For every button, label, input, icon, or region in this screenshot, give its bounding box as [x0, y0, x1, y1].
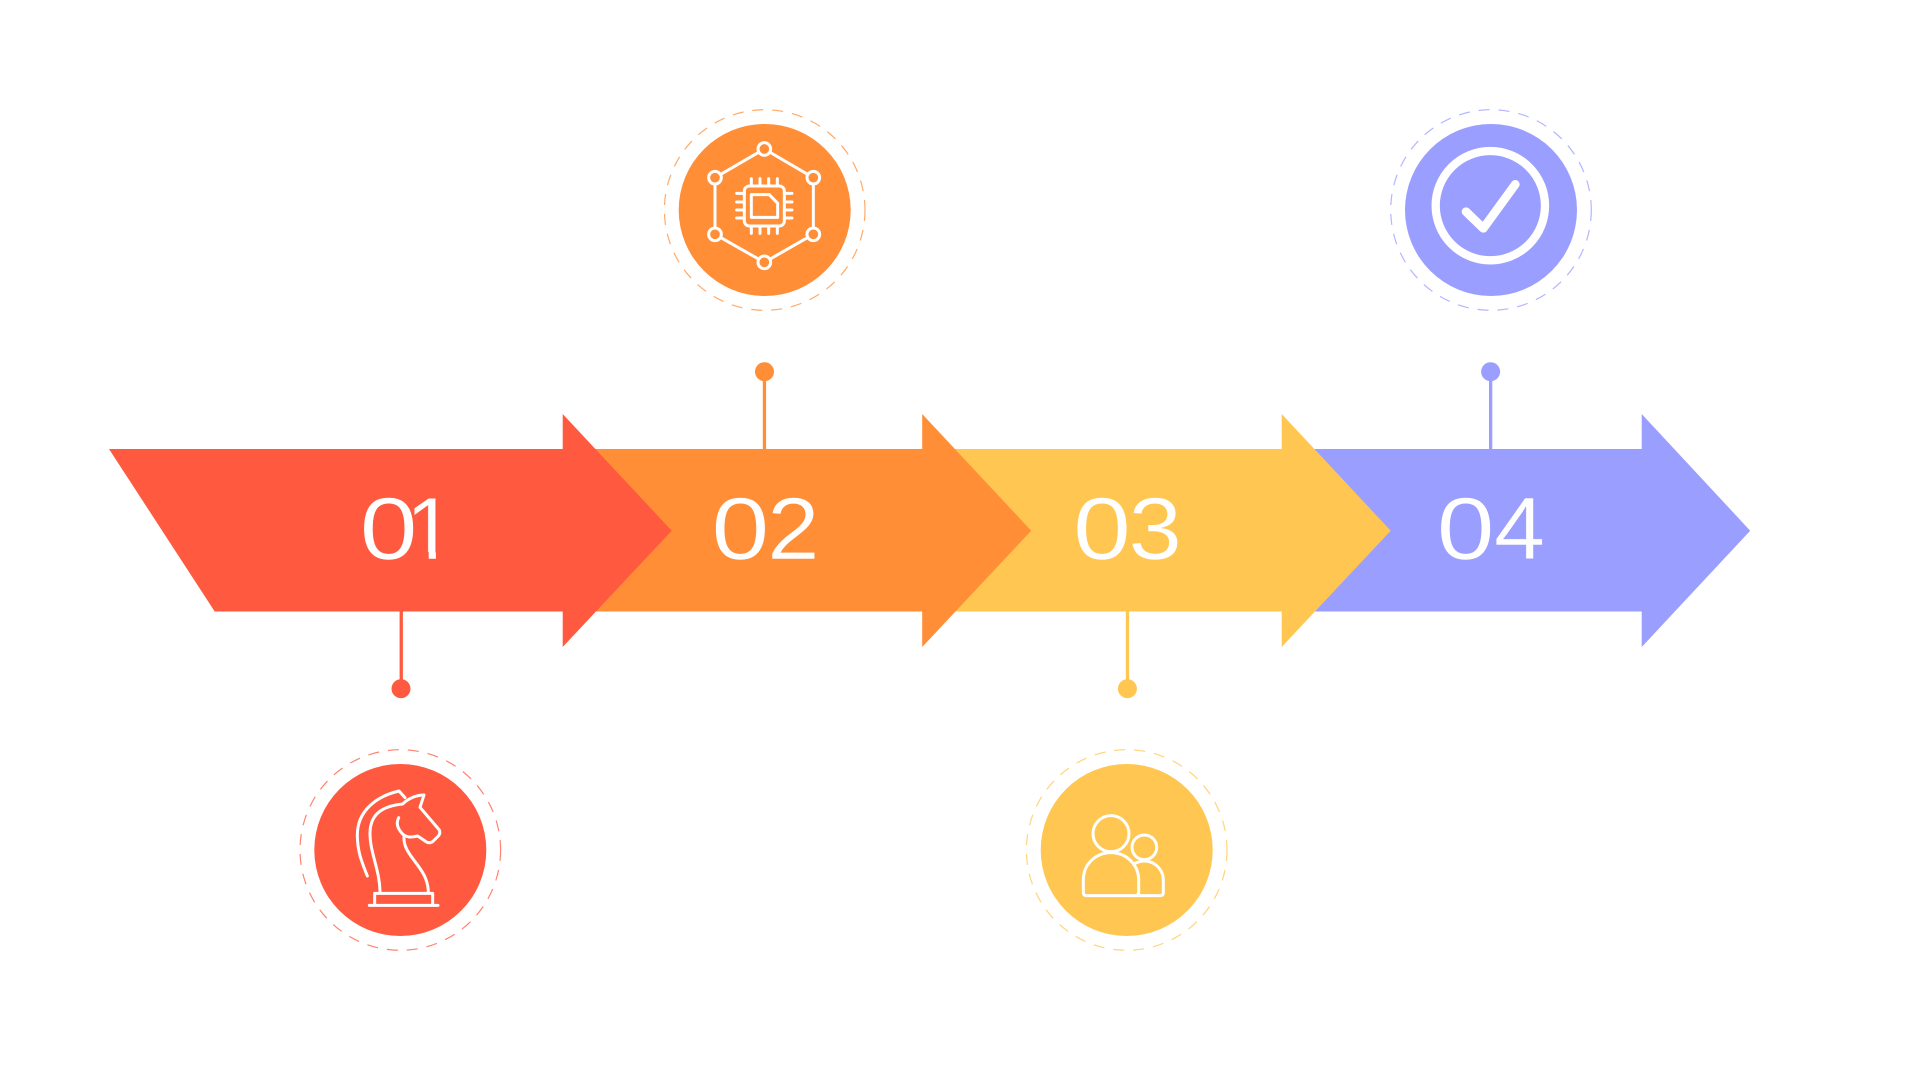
badge 4: check mark	[1391, 110, 1591, 310]
infographic	[109, 109, 1750, 951]
icon: people	[1083, 816, 1163, 896]
step 3 arrow	[880, 414, 1391, 647]
number 02: 2	[767, 481, 819, 579]
badge 3: people	[1026, 750, 1227, 950]
badge 2: network chip	[664, 110, 865, 310]
step 2 arrow	[520, 414, 1031, 647]
icon: chess knight	[357, 791, 440, 905]
number 01	[364, 498, 436, 560]
icon: check mark	[1436, 151, 1545, 260]
number 04	[1437, 481, 1545, 579]
number 03: 0	[1073, 481, 1131, 578]
number 01: 0	[360, 481, 418, 578]
step 1 arrow	[109, 414, 672, 647]
number 02: 0	[712, 481, 769, 578]
number 02	[712, 481, 819, 579]
connector 1	[392, 611, 410, 698]
number 04: 4	[1494, 481, 1545, 579]
step 4 arrow	[1240, 414, 1750, 647]
icon: network chip	[709, 143, 820, 269]
number 03: 3	[1128, 480, 1182, 578]
connector 3	[1118, 611, 1137, 698]
connector 2	[755, 362, 774, 450]
number 03	[1073, 480, 1182, 578]
number 04: 0	[1437, 481, 1495, 578]
number 01: 1	[406, 479, 455, 578]
badge 1: chess knight	[300, 750, 501, 950]
connector 4	[1481, 362, 1500, 450]
